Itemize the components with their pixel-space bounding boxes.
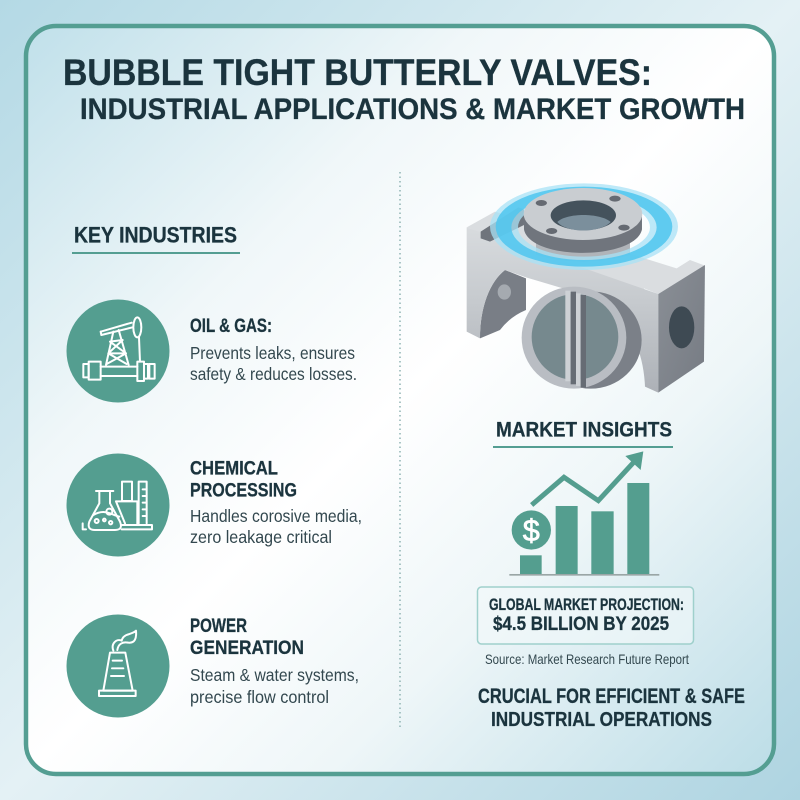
left leg inner shade	[480, 270, 526, 338]
text: chemical processing	[190, 458, 362, 547]
icon: flask and tanks	[66, 454, 170, 556]
icon: dollar coin: $	[523, 514, 540, 548]
icon: power plant stack	[66, 614, 170, 718]
illustration: butterfly valve	[467, 183, 705, 393]
panel: power generation	[66, 614, 359, 718]
source note: Source: Market Research Future Report	[485, 651, 689, 667]
text: chemical processing: CHEMICAL	[190, 458, 278, 480]
text: chemical processing: Handles corosive media,	[190, 506, 362, 526]
callout: market projection	[478, 587, 694, 644]
icon: dollar coin	[512, 510, 551, 550]
text: oil and gas: safety & reduces losses.	[190, 364, 357, 384]
callout: market projection: GLOBAL MARKET PROJECTION:	[489, 596, 684, 614]
title: INDUSTRIAL APPLICATIONS & MARKET GROWTH	[80, 93, 745, 126]
flange neck	[536, 242, 630, 262]
title	[63, 52, 745, 126]
heading: key industries: KEY INDUSTRIES	[74, 222, 237, 248]
top notch	[481, 207, 524, 242]
sealing rings	[490, 183, 678, 270]
closing statement	[478, 685, 745, 731]
panel: oil and gas	[66, 300, 357, 402]
beam top	[467, 212, 705, 294]
text: power generation: precise flow control	[190, 687, 329, 707]
text: power generation: POWER	[190, 615, 247, 637]
panel: chemical processing	[66, 454, 362, 556]
heading: market insights: MARKET INSIGHTS	[496, 418, 672, 442]
text: oil and gas	[190, 315, 357, 384]
flange	[524, 188, 642, 253]
bar chart with trend arrow	[509, 451, 659, 576]
text: power generation	[190, 615, 359, 707]
closing statement: INDUSTRIAL OPERATIONS	[491, 708, 712, 731]
title: BUBBLE TIGHT BUTTERLY VALVES:	[63, 52, 652, 93]
bars	[520, 483, 649, 575]
text: oil and gas: Prevents leaks, ensures	[190, 343, 355, 363]
right side face	[658, 265, 705, 393]
icon: oil pump and pipeline	[66, 300, 170, 402]
beam front and legs	[467, 227, 658, 393]
callout: market projection: $4.5 BILLION BY 2025	[493, 614, 669, 635]
valve disc	[522, 287, 626, 389]
text: chemical processing: zero leakage critical	[190, 527, 332, 547]
disc back crescent	[540, 291, 642, 389]
text: power generation: GENERATION	[190, 637, 304, 659]
text: chemical processing: PROCESSING	[190, 480, 297, 502]
text: oil and gas: OIL & GAS:	[190, 315, 272, 337]
text: power generation: Steam & water systems,	[190, 665, 359, 685]
trend arrow	[532, 451, 643, 505]
